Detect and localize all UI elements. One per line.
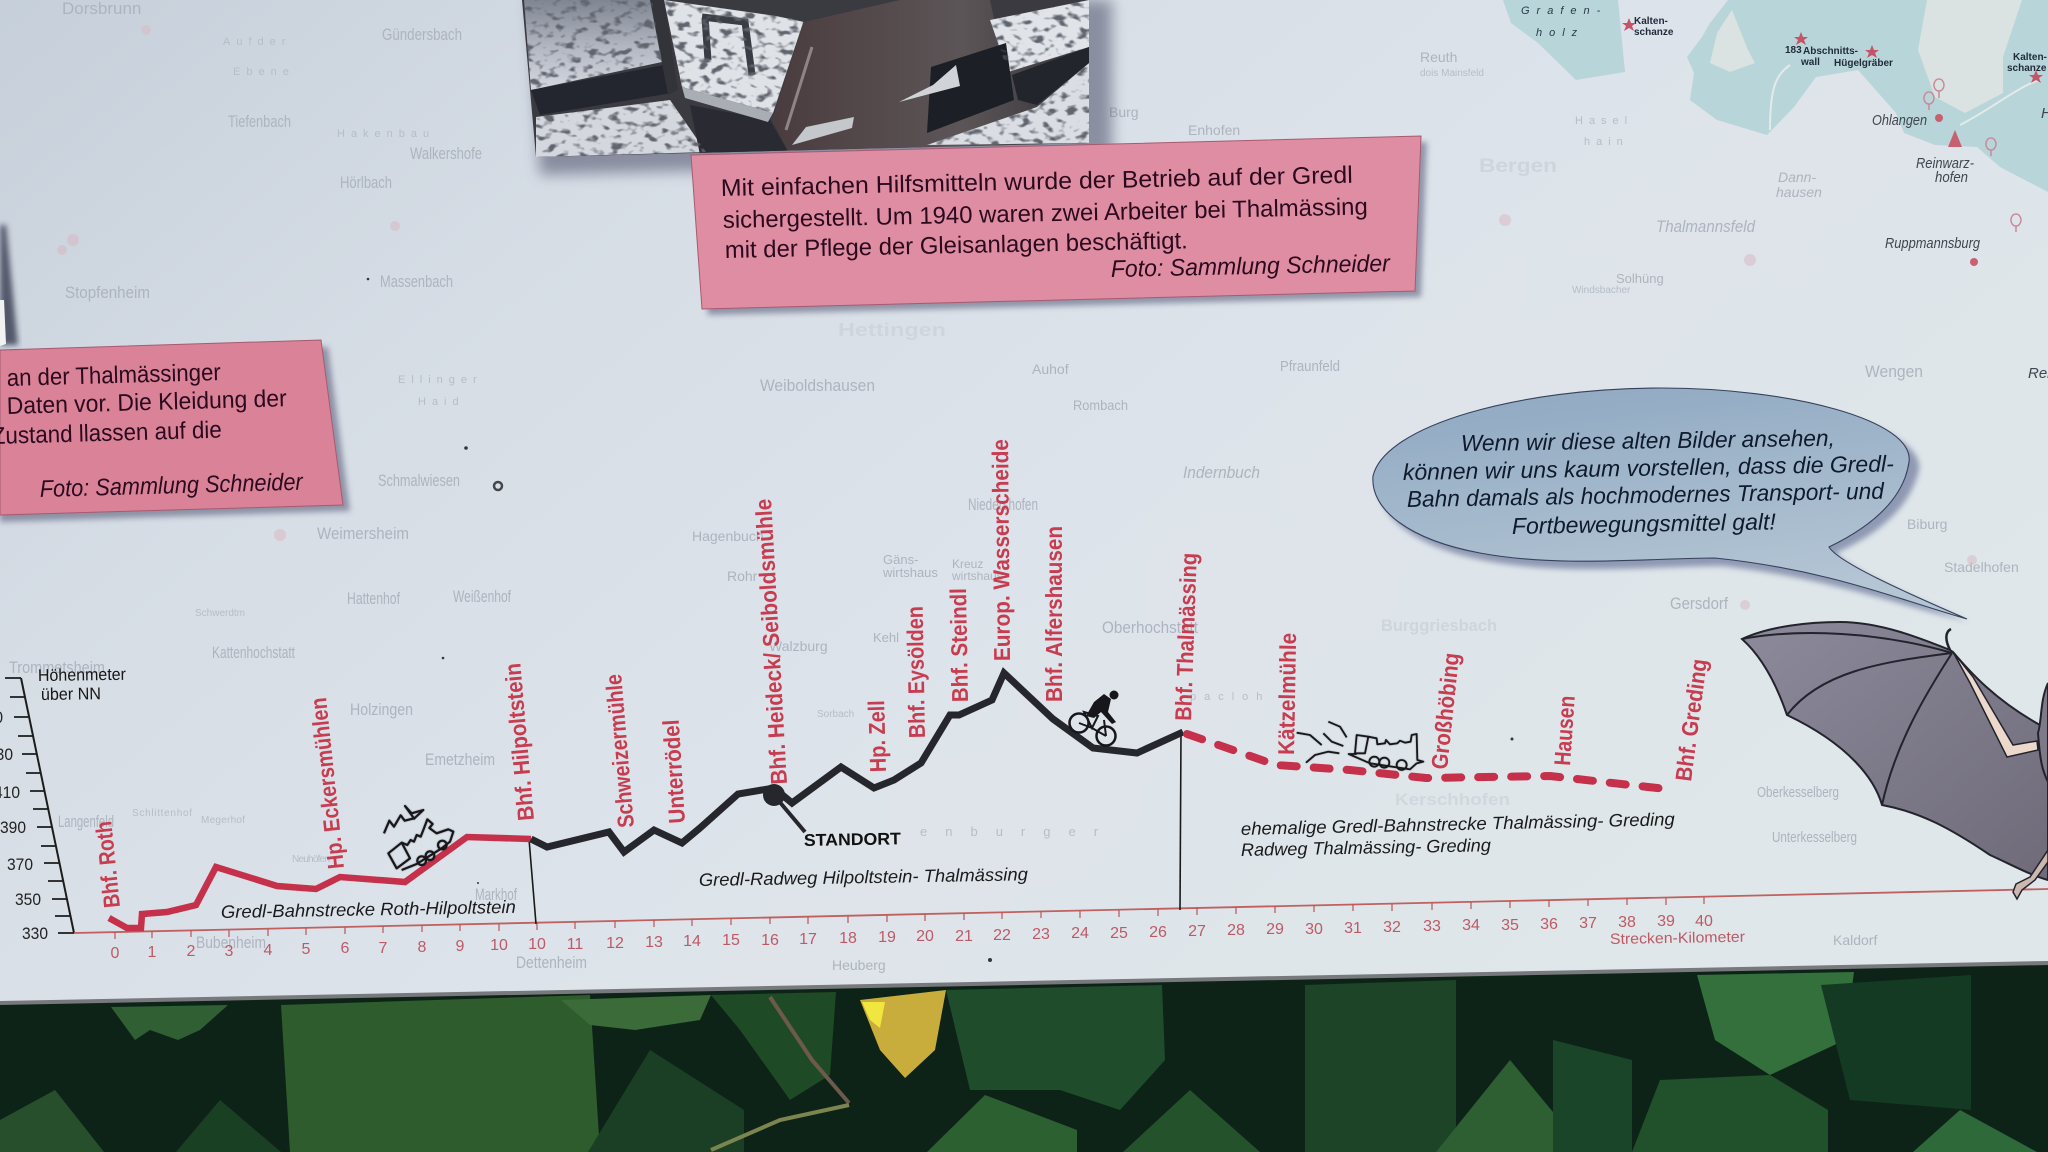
profile line: Roth to Hilpoltstein (red): [109, 837, 531, 928]
profile line: Thalmässing to Greding (red dashed): [1187, 734, 1666, 789]
faded map: place names: Kaldorf: [1833, 932, 1877, 948]
faded map: place names: Gäns-: [883, 552, 918, 567]
dark map labels and symbols, top right: Ruppmannsburg: [1885, 235, 1981, 252]
station labels: Kätzelmühle: [1273, 633, 1301, 755]
faded map: place names: Niedershofen: [968, 495, 1038, 514]
faded map: place names: Kreuz: [952, 557, 983, 571]
axis numbers: 330: [22, 924, 48, 943]
faded map: place names: Weißenhof: [453, 587, 511, 606]
bat arm: [1953, 652, 2038, 757]
faded map: place names: Walkershofe: [410, 144, 482, 163]
kilometre numbers: 9: [456, 938, 465, 955]
station labels: Schweizermühle: [600, 673, 639, 829]
axis title: über NN: [41, 684, 101, 704]
faded map: place names: Kattenhochstatt: [212, 643, 295, 662]
dark map labels and symbols, top right: Kalten-: [1634, 16, 1668, 27]
station labels: Bhf. Eysölden: [902, 606, 930, 738]
faded map: place names: Sorbach: [817, 709, 854, 720]
faded map: place names: Megerhof: [201, 815, 245, 826]
faded map: place names: Ellinger: [398, 374, 483, 386]
caption text: Daten vor. Die Kleidung der: [6, 385, 287, 420]
axis numbers: 350: [15, 890, 41, 909]
faded map: place names: Thalmannsfeld: [1656, 217, 1755, 236]
kilometre numbers: 38: [1618, 914, 1636, 931]
faded map: place names: Unterkesselberg: [1772, 829, 1857, 846]
section captions: ehemalige Gredl-Bahnstrecke Thalmässing- Greding: [1241, 809, 1675, 839]
pink caption box: top: [691, 136, 1427, 315]
faded map: place names: hausen: [1776, 184, 1822, 200]
section captions: Gredl-Bahnstrecke Roth-Hilpoltstein: [221, 897, 516, 922]
icon: cyclist: [1070, 690, 1118, 746]
station labels: Bhf. Thalmässing: [1170, 552, 1202, 721]
kilometre numbers: 27: [1188, 923, 1206, 940]
caption text: sichergestellt. Um 1940 waren zwei Arbeiter bei Thalmässing: [723, 193, 1368, 234]
kilometre numbers: 16: [761, 932, 779, 949]
bat mascot: [1742, 622, 2048, 899]
bubble text: Wenn wir diese alten Bilder ansehen,: [1461, 425, 1835, 456]
kilometre numbers: 3: [225, 943, 234, 960]
faded map: place names: Ebene: [233, 66, 295, 78]
profile line: Hilpoltstein to Thalmässing (black): [531, 673, 1183, 852]
kilometre numbers: 33: [1423, 918, 1441, 935]
kilometre numbers: 14: [683, 933, 701, 950]
faded map: place names: Neuhöfen: [292, 854, 330, 865]
icon: steam locomotive, Greding section: [1297, 722, 1423, 770]
dark map labels and symbols, top right: Hügelgräber: [1834, 58, 1893, 69]
faded map: place names: Wengen: [1865, 362, 1923, 381]
bat wing: [1742, 622, 2048, 880]
speech bubble shadow: [1380, 396, 1967, 621]
faded map: place names: Burggriesbach: [1381, 616, 1497, 635]
photo: black-and-white track maintenance trolley: [520, 0, 1095, 160]
kilometre numbers: 7: [379, 940, 388, 957]
standort marker: [763, 784, 902, 850]
kilometre numbers: 4: [264, 942, 273, 959]
faded map: place names: Haid: [418, 396, 465, 408]
dark map labels and symbols, top right: Grafen-: [1521, 5, 1607, 17]
faded map: place names: Bubenheim: [196, 933, 266, 952]
faded map: place names: Rohr: [727, 568, 758, 584]
faded map: place names: Heuberg: [832, 957, 886, 973]
kilometre numbers: 28: [1227, 922, 1245, 939]
kilometre numbers: 21: [955, 928, 973, 945]
kilometre numbers: 20: [916, 928, 934, 945]
kilometre numbers: 32: [1383, 919, 1401, 936]
faded map: place names: Weimersheim: [317, 524, 409, 543]
dark map labels and symbols, top right: wall: [1800, 57, 1820, 68]
section captions: [221, 809, 1675, 922]
faded map: place names: Walzburg: [769, 638, 828, 654]
faded map: place names: Biburg: [1907, 516, 1947, 532]
kilometre numbers: 30: [1305, 921, 1323, 938]
faded map: place names: Hettingen: [838, 320, 946, 340]
faded map: place names: Hagenbuch: [692, 528, 764, 544]
faded map: place names: Hattenhof: [347, 589, 400, 608]
faded map: place names: Pfraunfeld: [1280, 358, 1340, 375]
faded map: place names: Hasel: [1575, 115, 1633, 127]
kilometre numbers: [111, 913, 1713, 962]
faded map: place names: Emetzheim: [425, 750, 495, 769]
section dividers: [529, 732, 1181, 924]
station labels: Bhf. Greding: [1670, 657, 1712, 783]
bubble text: Fortbewegungsmittel galt!: [1512, 508, 1777, 539]
caption text: mit der Pflege der Gleisanlagen beschäftigt.: [725, 227, 1188, 264]
faded map: place names: Stadelhofen: [1944, 559, 2019, 575]
kilometre numbers: 10: [528, 936, 546, 953]
kilometre numbers: 13: [645, 934, 663, 951]
caption text: an der Thalmässinger: [6, 359, 221, 392]
dark map labels and symbols, top right: hofen: [1935, 169, 1968, 186]
elevation axis with ticks: [0, 665, 126, 943]
station labels: [90, 439, 1712, 909]
axis title: [38, 665, 126, 704]
kilometre numbers: 18: [839, 930, 857, 947]
faded map: place names: Langenfeld: [58, 812, 114, 831]
kilometre numbers: 22: [993, 927, 1011, 944]
faded map: place names: Hörlbach: [340, 173, 392, 192]
dark map labels and symbols, top right: holz: [1536, 27, 1584, 39]
caption text: Foto: Sammlung Schneider: [39, 469, 304, 503]
wing claw: [1946, 629, 1951, 650]
dark map labels and symbols, top right: schanze: [2007, 63, 2047, 74]
kilometre numbers: 8: [418, 939, 427, 956]
faded map: place names: Bergen: [1479, 156, 1557, 177]
speech bubble: [1373, 388, 1967, 619]
station labels: Bhf. Heideck/ Seiboldsmühle: [750, 498, 792, 785]
caption text: Mit einfachen Hilfsmitteln wurde der Betrieb auf der Gredl: [721, 162, 1353, 202]
faded map: place names: Weiboldshausen: [760, 376, 875, 395]
faded map: place names: wirtshaus: [951, 569, 1003, 583]
kilometre numbers: 35: [1501, 917, 1519, 934]
station labels: Hp. Eckersmühlen: [305, 696, 349, 870]
faded map: place names: Gersdorf: [1670, 594, 1728, 613]
bubble text: können wir uns kaum vorstellen, dass die Gredl-: [1403, 450, 1894, 485]
pink caption box: left, cut off by image edge: [0, 340, 350, 522]
faded map: place names: Oberkesselberg: [1757, 784, 1839, 801]
faded map: place names: Windsbacher: [1572, 285, 1631, 296]
dark map labels and symbols, top right: schanze: [1634, 27, 1674, 38]
bat body: [2038, 683, 2048, 782]
faded map: place names: Aufder: [223, 36, 291, 48]
faded map: place names: Schlittenhof: [132, 808, 192, 819]
kilometre numbers: 40: [1695, 913, 1713, 930]
caption text: [0, 359, 304, 503]
faded map: place names: Solhüng: [1616, 271, 1664, 286]
faded map: place names: pacloh: [1190, 691, 1270, 703]
section captions: Radweg Thalmässing- Greding: [1241, 835, 1491, 860]
faded map: pink village blotches: [57, 25, 1977, 610]
kilometre numbers: 36: [1540, 916, 1558, 933]
kilometre numbers: 11: [567, 936, 583, 953]
kilometre numbers: 26: [1149, 924, 1167, 941]
station labels: Hausen: [1549, 695, 1580, 766]
kilometre numbers: 23: [1032, 926, 1050, 943]
faded map: place names: Oberhochstatt: [1102, 618, 1198, 637]
faded map: place names: Rombach: [1073, 397, 1128, 413]
kilometre numbers: 34: [1462, 917, 1480, 934]
dark map labels and symbols, top right: [1521, 5, 2048, 382]
section captions: Gredl-Radweg Hilpoltstein- Thalmässing: [699, 864, 1028, 890]
faded map: place names: Stopfenheim: [65, 283, 150, 302]
kilometre numbers: 37: [1579, 915, 1597, 932]
dark map labels and symbols, top right: Ohlangen: [1872, 112, 1927, 129]
axis numbers: 390: [0, 818, 26, 837]
station labels: Bhf. Steindl: [945, 588, 973, 702]
wing fingers: [1742, 633, 1952, 805]
board lower edge: [0, 963, 2048, 1003]
bat foot: [2013, 850, 2048, 899]
kilometre axis: [74, 889, 2048, 962]
station labels: Europ. Wasserscheide: [987, 439, 1015, 661]
specks on the board: [367, 278, 1514, 962]
station labels: Bhf. Roth: [90, 820, 125, 909]
axis numbers: 370: [7, 855, 33, 874]
faded map: place names: Schwerdtm: [195, 608, 245, 619]
faded map: place names: hain: [1584, 136, 1629, 148]
faded map: place names: Kehl: [873, 630, 899, 645]
axis title: Höhenmeter: [38, 665, 126, 685]
faded map: place names: enburger: [920, 824, 1116, 839]
kilometre numbers: 24: [1071, 925, 1089, 942]
dark map labels and symbols, top right: 183: [1785, 45, 1802, 56]
kilometre numbers: 17: [799, 931, 817, 948]
kilometre numbers: 25: [1110, 925, 1128, 942]
faded map: place names: Enhofen: [1188, 122, 1240, 138]
dark map labels and symbols, top right: Reinwarz-: [1916, 155, 1974, 172]
faded map: place names: Trommetsheim: [9, 658, 105, 677]
icon: steam locomotive, Roth section: [384, 806, 453, 870]
faded map: place names: Holzingen: [350, 700, 413, 719]
faded map: place names: wirtshaus: [882, 565, 938, 580]
faded map: place names: Kerschhofen: [1395, 790, 1510, 809]
kilometre numbers: 15: [722, 932, 740, 949]
station labels: Hp. Zell: [863, 700, 891, 773]
faded map: place names: Burg: [1109, 104, 1139, 120]
faded map: place names: Gündersbach: [382, 25, 462, 44]
bubble text: Bahn damals als hochmodernes Transport- und: [1407, 478, 1885, 512]
faded map: place names: Massenbach: [380, 272, 453, 291]
station labels: Bhf. Hilpoltstein: [499, 662, 539, 822]
station labels: Unterrödel: [658, 719, 690, 824]
kilometre numbers: 19: [878, 929, 896, 946]
caption text: [721, 162, 1391, 283]
faded map: place names: Dann-: [1778, 169, 1816, 185]
kilometre numbers: 29: [1266, 921, 1284, 938]
faded map: forest patches: [1503, 0, 2048, 192]
foliage background: [0, 960, 2048, 1152]
faded map: place names: Markhof: [475, 885, 517, 904]
kilometre numbers: 39: [1657, 913, 1675, 930]
sliver of neighbouring photo at left edge: [0, 225, 18, 346]
faded map: place names: Schmalwiesen: [378, 471, 460, 490]
faded map: place names: Reuth: [1420, 49, 1457, 65]
station labels: Großhöbing: [1426, 651, 1464, 771]
photo shadow: [530, 0, 1112, 175]
kilometre numbers: 10: [490, 937, 508, 954]
axis numbers: [0, 708, 48, 943]
faded map: place names: Indernbuch: [1183, 463, 1260, 482]
faded map: place names: dois Mainsfeld: [1420, 68, 1484, 79]
kilometre numbers: 0: [111, 945, 120, 962]
kilometre numbers: 6: [341, 940, 350, 957]
faded map: place names: Dettenheim: [516, 953, 587, 972]
axis caption: Strecken-Kilometer: Strecken-Kilometer: [1610, 929, 1745, 948]
kilometre numbers: 12: [606, 935, 624, 952]
station labels: Bhf. Alfershausen: [1041, 526, 1067, 702]
standort label: STANDORT: [804, 829, 902, 850]
caption text: Foto: Sammlung Schneider: [1111, 250, 1391, 283]
kilometre numbers: 5: [302, 941, 311, 958]
bubble text: [1403, 425, 1894, 539]
faded map: place names: Hakenbau: [337, 128, 435, 140]
faded map: place names: Tiefenbach: [228, 112, 291, 131]
kilometre numbers: 2: [187, 943, 196, 960]
dark map labels and symbols, top right: Abschnitts-: [1803, 46, 1858, 57]
dark map labels and symbols, top right: Kalten-: [2013, 52, 2047, 63]
kilometre numbers: 31: [1344, 920, 1362, 937]
faded map: place names: Auhof: [1032, 361, 1069, 377]
kilometre numbers: 1: [148, 944, 157, 961]
